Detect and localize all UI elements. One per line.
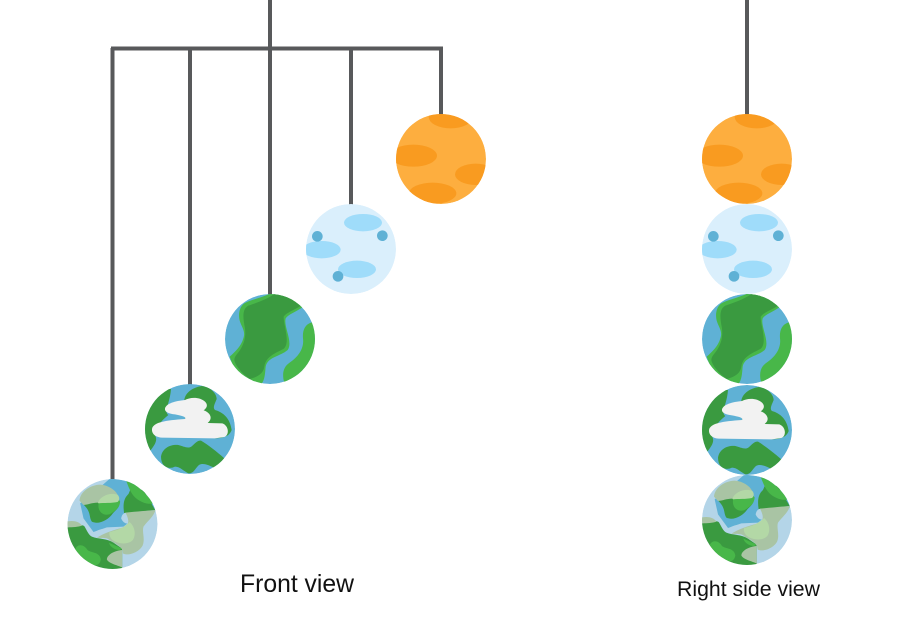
side view: hazy earth — [700, 474, 792, 566]
mobile diagram — [68, 0, 820, 600]
front view: hazy earth — [65, 478, 157, 570]
front view: orange planet — [390, 106, 496, 204]
front view: green continents earth — [225, 293, 318, 385]
side view: green continents earth — [702, 293, 795, 385]
side view: ice planet — [699, 204, 792, 294]
label: front view: Front view — [240, 570, 355, 598]
label: right side view: Right side view — [677, 578, 821, 601]
side view: cloudy earth — [699, 385, 792, 475]
front view: ice planet — [303, 204, 396, 294]
front view hanger rods — [111, 0, 443, 482]
front view: cloudy earth — [142, 384, 235, 474]
side view: orange planet — [696, 106, 802, 204]
right side view hanger rod — [745, 0, 749, 116]
